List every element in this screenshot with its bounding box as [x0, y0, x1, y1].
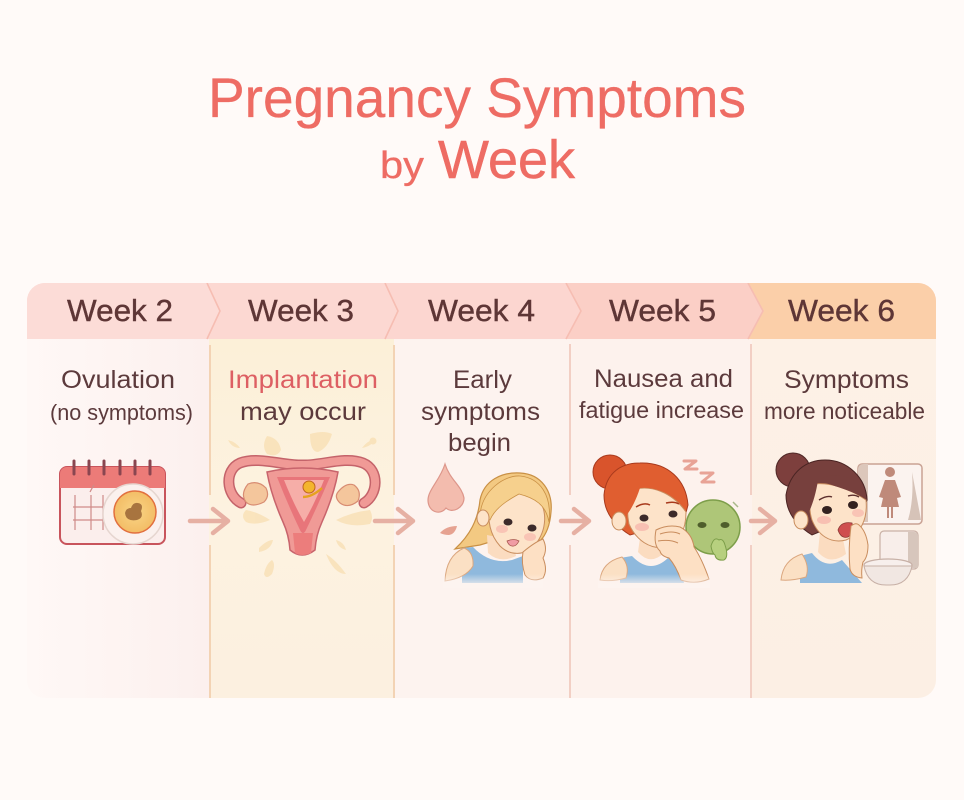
face [628, 488, 686, 548]
column dividers [210, 344, 751, 698]
text: week 4: begin [448, 429, 511, 457]
week labels: Week 3 [248, 293, 354, 328]
face [489, 489, 545, 553]
uterus body [267, 468, 338, 555]
text: week 4: Early [453, 366, 513, 394]
arrow: week 5 to 6 [751, 509, 775, 533]
text: week 3 [228, 366, 378, 426]
tank top [620, 556, 684, 583]
green nausea face [686, 500, 740, 554]
hair [786, 460, 867, 535]
text: week 3: may occur [240, 398, 366, 426]
bun [776, 453, 810, 487]
face [810, 484, 866, 541]
arrow: week 4 to 5 [561, 509, 589, 533]
week labels [67, 293, 895, 328]
text: week 3: Implantation [228, 366, 378, 394]
icon: blonde woman [443, 473, 551, 588]
text: week 2: Ovulation [61, 366, 175, 394]
text: week 5: Nausea and [594, 365, 733, 393]
hand [655, 526, 709, 582]
shoulder [445, 548, 473, 581]
bun [593, 455, 627, 489]
tank top [800, 553, 862, 583]
icon: uterus [228, 432, 376, 577]
icon: breast tenderness drop [428, 464, 464, 535]
week labels: Week 6 [788, 293, 895, 328]
glow petals [228, 432, 376, 577]
back hair [455, 473, 551, 549]
header chevrons [27, 283, 936, 339]
title: Pregnancy Symptoms [208, 66, 746, 129]
icon: calendar with egg [60, 461, 165, 544]
week labels: Week 2 [67, 293, 173, 328]
zzz [684, 461, 714, 482]
icon: restroom sign and toilet [858, 464, 922, 585]
text: week 5: fatigue increase [579, 397, 744, 423]
text: week 5 [579, 365, 744, 423]
panel: weekly timeline [27, 283, 936, 698]
title: by [380, 145, 424, 187]
week labels: Week 4 [428, 293, 535, 328]
icon: red-haired woman with nausea [593, 455, 740, 588]
hair [604, 463, 688, 535]
text: week 4: symptoms [421, 398, 540, 426]
implanting egg [303, 481, 315, 493]
arrow: week 2 to 3 [190, 509, 228, 533]
text: week 6: more noticeable [764, 398, 925, 424]
title [208, 66, 746, 190]
text: week 6: Symptoms [784, 366, 909, 394]
text: week 2 [50, 366, 193, 425]
tank top [462, 547, 523, 583]
ovaries [243, 483, 268, 505]
text: week 4 [421, 366, 540, 457]
title: Week [438, 130, 576, 190]
tubes [229, 460, 375, 503]
column backgrounds [165, 339, 936, 698]
week labels: Week 5 [609, 293, 716, 328]
hand [849, 524, 868, 578]
arrow: week 3 to 4 [375, 509, 413, 533]
text: week 6 [764, 366, 925, 424]
icon: brunette woman [776, 453, 868, 583]
text: week 2: (no symptoms) [50, 400, 193, 425]
hand [522, 539, 546, 580]
